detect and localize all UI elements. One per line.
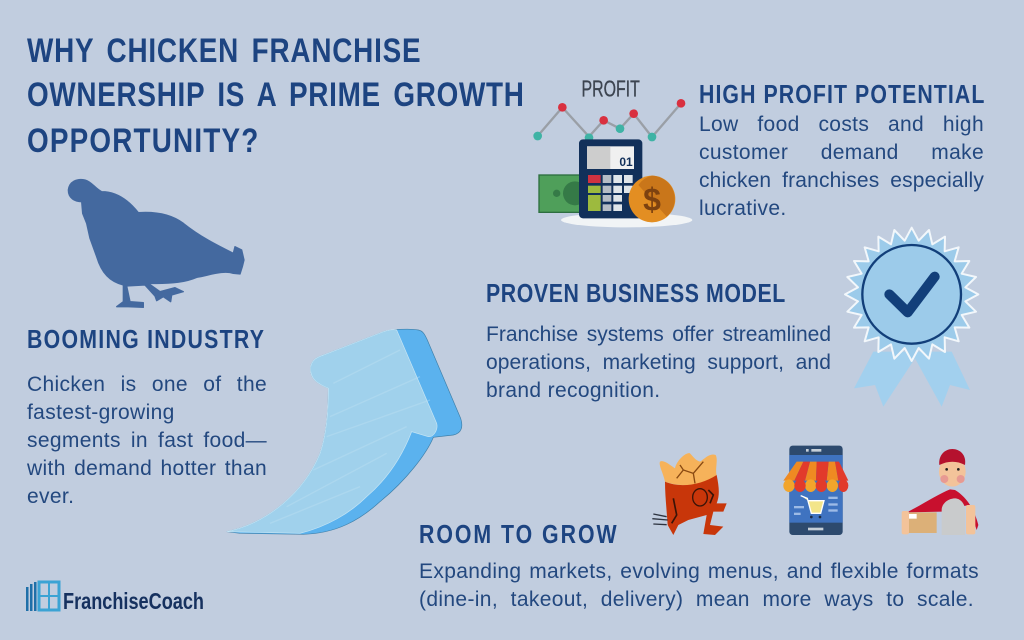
icon: delivery person	[902, 449, 978, 535]
title: OWNERSHIP IS A PRIME GROWTH	[27, 75, 524, 114]
icon: mobile store	[783, 446, 848, 535]
text: room to grow: Expanding markets, evolving menus, and flexible formats	[419, 560, 979, 583]
title: WHY CHICKEN FRANCHISE	[27, 31, 421, 70]
text: booming industry: fastest-growing	[27, 401, 175, 424]
heading: proven business model: PROVEN BUSINESS MODEL	[486, 279, 785, 309]
icon: upward arrow	[226, 328, 462, 535]
text: proven business model	[486, 323, 831, 402]
text: booming industry: segments in fast food—	[27, 429, 267, 452]
heading: room to grow: ROOM TO GROW	[419, 520, 617, 550]
icon: hen silhouette	[68, 178, 245, 308]
title: OPPORTUNITY?	[27, 121, 258, 160]
text: high profit potential	[699, 113, 984, 220]
icon: profit calculator: $	[643, 182, 661, 218]
text: high profit potential: Low food costs and high	[699, 113, 984, 136]
heading: high profit potential: HIGH PROFIT POTENTIAL	[699, 80, 984, 110]
text: booming industry	[27, 373, 267, 508]
text: proven business model: operations, marketing support, and	[486, 351, 831, 374]
icon: profit calculator	[533, 76, 692, 228]
icon: profit calculator: 01	[619, 155, 633, 169]
text: proven business model: Franchise systems offer streamlined	[486, 323, 831, 346]
heading: booming industry: BOOMING INDUSTRY	[27, 325, 264, 355]
text: room to grow	[419, 560, 979, 611]
text: booming industry: Chicken is one of the	[27, 373, 267, 396]
icon: profit calculator: PROFIT	[582, 76, 640, 102]
text: high profit potential: chicken franchises especially	[699, 169, 984, 192]
text: proven business model: brand recognition.	[486, 379, 660, 402]
text: high profit potential: customer demand make	[699, 141, 984, 164]
text: booming industry: ever.	[27, 485, 74, 508]
title	[27, 31, 524, 160]
logo: FranchiseCoach: FranchiseCoach	[63, 588, 204, 614]
logo: FranchiseCoach	[26, 580, 204, 614]
text: booming industry: with demand hotter than	[27, 457, 267, 480]
icon: chicken bucket mascot	[652, 453, 727, 535]
text: high profit potential: lucrative.	[699, 197, 787, 220]
icon: award rosette	[844, 226, 980, 406]
text: room to grow: (dine-in, takeout, delivery) mean more ways to scale.	[419, 588, 974, 611]
